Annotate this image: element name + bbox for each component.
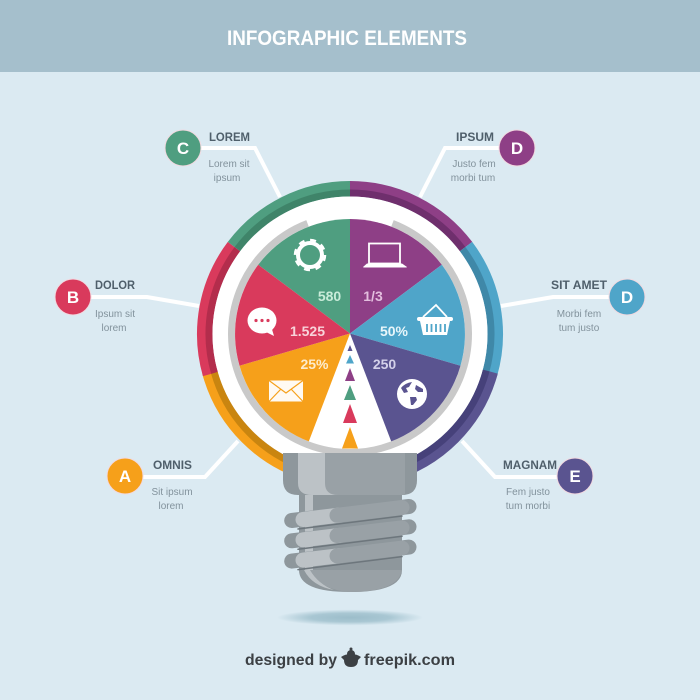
- value labels: 1/3: [363, 288, 383, 304]
- icon: globe: [397, 379, 427, 409]
- value labels: 25%: [300, 356, 329, 372]
- icon: laptop: [363, 244, 407, 268]
- footer credit: [245, 648, 455, 669]
- callout A: omnis: [107, 458, 193, 512]
- callout B: dolor: B: [67, 288, 79, 307]
- callout D: ipsum: IPSUM: [456, 130, 494, 144]
- callout D: sit amet: [551, 278, 645, 334]
- callout A: omnis: OMNIS: [153, 458, 192, 472]
- connector lines: [90, 148, 610, 477]
- thread 1: [292, 506, 409, 529]
- value labels: 250: [373, 356, 396, 372]
- callout D: sit amet: Morbi fem: [557, 309, 601, 320]
- callout E: magnam: MAGNAM: [503, 458, 557, 472]
- callout A: omnis: lorem: [158, 501, 184, 512]
- screw body: [299, 490, 402, 592]
- thread 3: [292, 547, 409, 570]
- callout C: lorem: C: [177, 139, 189, 158]
- callout B: dolor: Ipsum sit: [95, 309, 135, 320]
- collar: [283, 453, 417, 495]
- value labels: 580: [318, 288, 341, 304]
- slice: red: [235, 265, 350, 366]
- bulb outer ring: [142, 126, 558, 542]
- callout D: sit amet: SIT AMET: [551, 278, 608, 292]
- icon: speech bubble: [248, 308, 276, 336]
- icon: envelope: [269, 380, 303, 402]
- title: INFOGRAPHIC ELEMENTS: [227, 27, 467, 50]
- callout E: magnam: E: [569, 467, 581, 486]
- slice: orange: [240, 334, 350, 441]
- pie chart: [235, 219, 465, 441]
- value labels: [290, 288, 409, 372]
- value labels: 50%: [380, 323, 409, 339]
- callout C: lorem: ipsum: [214, 173, 240, 184]
- callout D: ipsum: morbi tum: [451, 173, 495, 184]
- callout D: ipsum: Justo fem: [452, 159, 496, 170]
- slice: purple: [350, 219, 442, 334]
- callout A: omnis: A: [119, 467, 131, 486]
- bulb white glass: [212, 196, 488, 472]
- thread 2: [292, 527, 409, 549]
- callout C: lorem: LOREM: [209, 130, 250, 144]
- header banner: [0, 0, 700, 72]
- value labels: 1.525: [290, 323, 325, 339]
- callout D: sit amet: D: [621, 288, 633, 307]
- bulb shadow: [277, 610, 423, 626]
- slice: indigo: [350, 334, 460, 441]
- callout D: ipsum: D: [511, 139, 523, 158]
- callout D: sit amet: tum justo: [559, 323, 600, 334]
- icon: gear: [295, 240, 325, 270]
- icon: freepik logo: [341, 648, 361, 667]
- footer credit: freepik.com: [364, 652, 455, 669]
- icon: basket: [417, 305, 453, 335]
- callout B: dolor: lorem: [101, 323, 127, 334]
- callout C: lorem: [165, 130, 250, 184]
- callout C: lorem: Lorem sit: [208, 159, 250, 170]
- callout B: dolor: DOLOR: [95, 278, 135, 292]
- bulb screw base: [283, 453, 417, 592]
- callout D: ipsum: [451, 130, 535, 184]
- callout A: omnis: Sit ipsum: [151, 487, 193, 498]
- callout E: magnam: Fem justo: [506, 487, 550, 498]
- triangles column: [342, 345, 358, 448]
- slice: green: [258, 219, 350, 334]
- footer credit: designed by: [245, 652, 337, 669]
- callout B: dolor: [55, 278, 135, 334]
- gray inner ring: [197, 181, 503, 487]
- callout E: magnam: [503, 458, 593, 512]
- slice: blue: [350, 265, 465, 366]
- callout E: magnam: tum morbi: [506, 501, 550, 512]
